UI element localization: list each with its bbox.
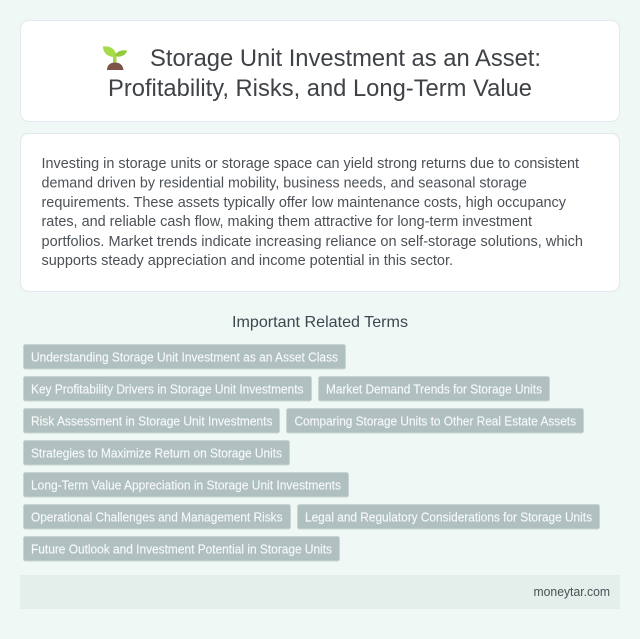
heading: related terms: Important Related Terms — [232, 314, 408, 331]
tag: Key Profitability Drivers in Storage Unit Investments — [31, 382, 304, 396]
tag — [24, 440, 290, 465]
title text: Storage Unit Investment as an Asset: — [150, 45, 541, 72]
description text — [42, 156, 583, 269]
description text: Investing in storage units or storage space can yield strong returns due to consistent — [42, 156, 579, 172]
description text: requirements. These assets typically offer low maintenance costs, high occupancy — [42, 195, 567, 211]
tag — [24, 536, 340, 561]
tag — [318, 376, 550, 401]
tag: Comparing Storage Units to Other Real Estate Assets — [294, 414, 576, 428]
icon: seedling — [103, 46, 127, 70]
panel: title card — [20, 20, 620, 122]
tag — [24, 344, 346, 369]
tag: Risk Assessment in Storage Unit Investments — [31, 414, 272, 428]
tag: Long-Term Value Appreciation in Storage Unit Investments — [31, 478, 341, 492]
footer — [20, 575, 620, 609]
tag — [24, 408, 280, 433]
tag: Strategies to Maximize Return on Storage Units — [31, 446, 282, 460]
tag: Market Demand Trends for Storage Units — [326, 382, 542, 396]
footer source text: moneytar.com — [534, 585, 610, 599]
title text: Profitability, Risks, and Long-Term Value — [108, 75, 532, 102]
title text — [108, 45, 541, 102]
tag — [24, 472, 348, 497]
description text: supports steady appreciation and income potential in this sector. — [42, 253, 453, 269]
tag — [286, 408, 584, 433]
tag — [298, 504, 600, 529]
tag: Future Outlook and Investment Potential in Storage Units — [31, 542, 332, 556]
description text: rates, and reliable cash flow, making them attractive for long-term investment — [42, 214, 532, 230]
panel: related term tags — [24, 344, 600, 561]
description text: demand driven by residential mobility, business needs, and seasonal storage — [42, 176, 527, 192]
panel: description card — [20, 134, 620, 292]
tag: Legal and Regulatory Considerations for Storage Units — [305, 510, 592, 524]
tag — [24, 504, 290, 529]
description text: portfolios. Market trends indicate increasing reliance on self-storage solutions, which — [42, 234, 583, 250]
tag: Operational Challenges and Management Risks — [31, 510, 282, 524]
tag — [24, 376, 312, 401]
tag: Understanding Storage Unit Investment as an Asset Class — [31, 350, 338, 364]
